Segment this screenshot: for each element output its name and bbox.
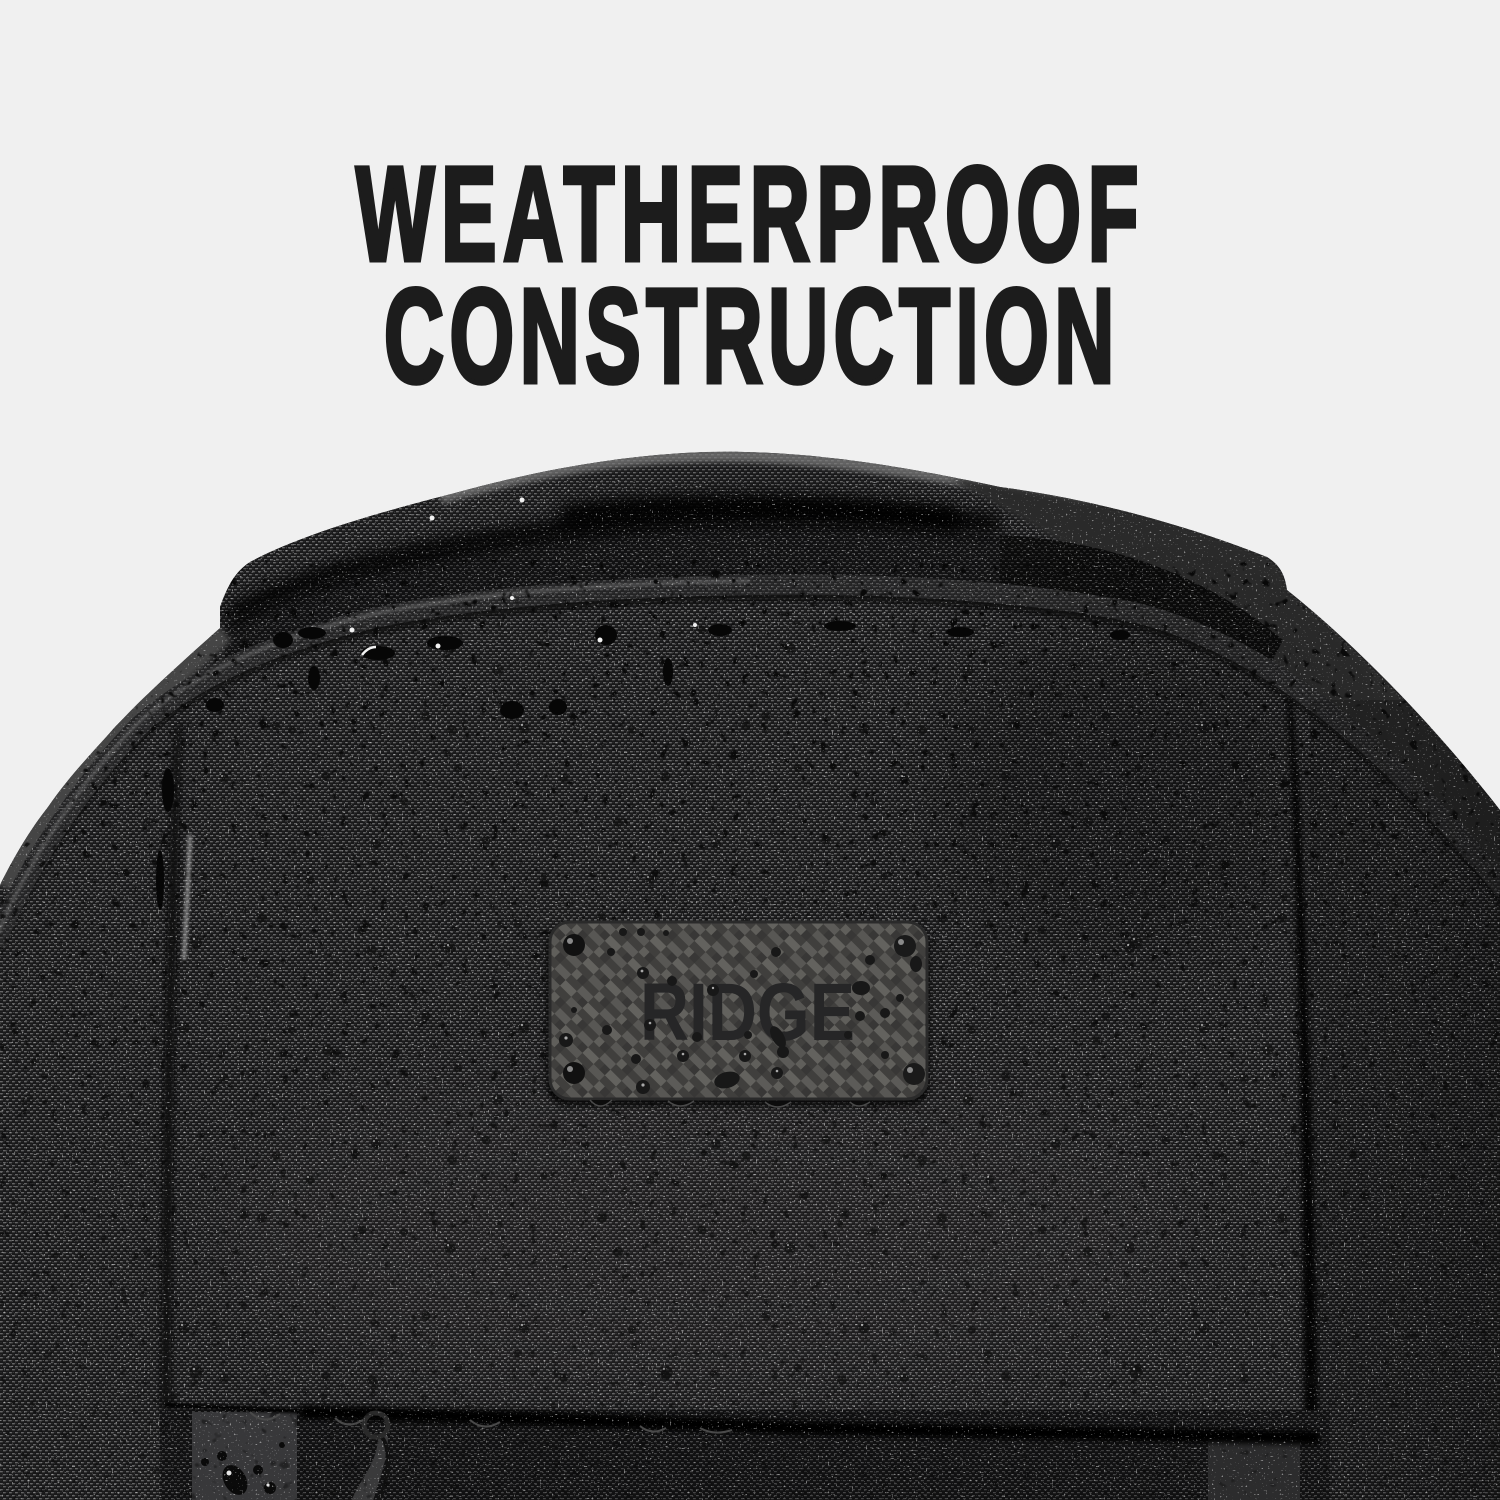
- warm glow on lower panel: [220, 1060, 1180, 1400]
- wet top rim highlight: [440, 455, 1090, 500]
- tab droplets: [201, 1442, 285, 1499]
- irregular droplet blobs: [0, 500, 1500, 1500]
- right grey tab: [1208, 1436, 1300, 1500]
- wet shine on left fold: [184, 835, 190, 960]
- title: Weatherproof Construction: [356, 139, 1138, 411]
- badge shadow: [546, 926, 930, 1106]
- strap pocket on right: [1000, 535, 1283, 665]
- title line 1: WEATHERPROOF: [356, 139, 1138, 289]
- drip line on flap edge: [250, 1412, 732, 1433]
- left rim: [0, 628, 220, 885]
- flap shadow left: [165, 1405, 300, 1411]
- left panel fold shadow: [161, 722, 182, 1410]
- scattered water droplets: [0, 500, 1500, 1500]
- handle under-shadow: [228, 514, 1000, 618]
- badge droplets: [559, 928, 922, 1094]
- carbon fibre logo badge: [546, 922, 930, 1107]
- upper strap: [225, 524, 1000, 658]
- drips below badge: [590, 1100, 870, 1107]
- backpack body fabric: [0, 440, 1500, 1500]
- fine glints: [0, 500, 1500, 1500]
- backpack photo: [0, 440, 1500, 1500]
- badge plate: [550, 922, 927, 1099]
- title line 2: CONSTRUCTION: [384, 261, 1114, 411]
- right top rim: [950, 478, 1500, 890]
- top handle and strap: [0, 452, 1500, 890]
- badge logo text: RIDGE: [640, 967, 855, 1058]
- right panel fold shadow: [1287, 700, 1319, 1500]
- soft shade over top right: [940, 620, 1320, 960]
- large droplets along top seam: [156, 498, 1130, 960]
- lower compartment below flap: [160, 1405, 1330, 1500]
- piping seam around top of bag: [0, 581, 1500, 956]
- badge screws: [563, 934, 925, 1085]
- zipper pull: [350, 1413, 388, 1500]
- soft shade over right side: [1310, 700, 1500, 1500]
- flap shadow: [300, 1412, 1320, 1438]
- left grey tab: [192, 1412, 297, 1500]
- handle band: [220, 452, 999, 624]
